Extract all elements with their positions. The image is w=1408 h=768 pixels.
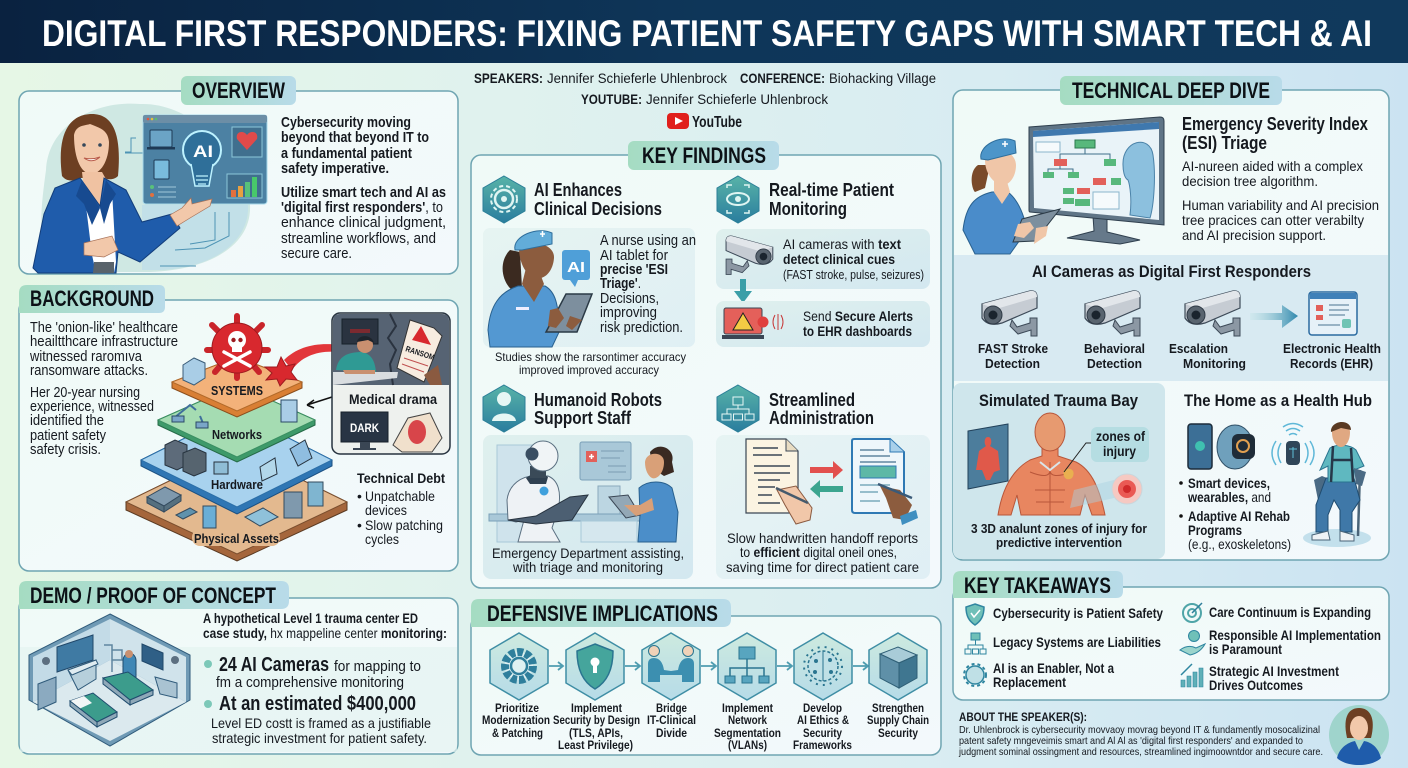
- panel: defensive implications: [471, 599, 941, 755]
- study note: improved improved accuracy: [519, 363, 659, 377]
- illustration: medical drama panel: [332, 313, 450, 454]
- defensive implications heading: DEFENSIVE IMPLICATIONS: [487, 601, 718, 626]
- illustration: person in exoskeleton: [1303, 422, 1371, 547]
- ESI triage text: Human variability and AI precision: [1182, 197, 1379, 213]
- overview heading: OVERVIEW: [192, 78, 285, 103]
- body with zones of injury: zones of: [1096, 428, 1145, 444]
- icon: YouTube logo: YouTube: [692, 114, 742, 131]
- illustration: medical drama panel: RANSOM: [404, 344, 436, 362]
- takeaway: strategic investment: [1181, 663, 1339, 693]
- background text: witnessed raromıva: [29, 349, 143, 365]
- body with zones of injury: injury: [1103, 443, 1136, 459]
- overview text: beyond that beyond IT to: [281, 129, 429, 146]
- secure alert card: Send Secure Alerts: [803, 308, 913, 324]
- face: [74, 124, 109, 174]
- dashboard: [143, 115, 267, 204]
- metric: 24 AI cameras: [204, 654, 421, 691]
- body with zones of injury: [998, 413, 1149, 515]
- camera: FAST stroke: FAST Stroke: [978, 341, 1048, 356]
- panel: key takeaways: [953, 571, 1389, 700]
- arrow: step 2 to 3: [625, 662, 640, 670]
- overview text: a fundamental patient: [281, 145, 412, 162]
- robot body: [507, 476, 560, 542]
- nurse finding text: Triage'.: [600, 276, 641, 292]
- takeaway: care continuum: [1183, 603, 1371, 622]
- layer: systems: [172, 357, 302, 417]
- takeaway: responsible AI: [1180, 627, 1381, 657]
- background heading: BACKGROUND: [30, 286, 154, 311]
- camera: escalation: [1169, 291, 1246, 371]
- takeaway: strategic investment: Drives Outcomes: [1209, 677, 1303, 693]
- robot finding text: Emergency Department assisting,: [492, 545, 684, 561]
- hands: [170, 198, 212, 226]
- nurse figure: [972, 165, 990, 192]
- robot finding text: [492, 545, 684, 575]
- about the speaker: [958, 710, 1323, 758]
- step: prioritize modernization: & Patching: [492, 726, 543, 740]
- speaker and conference details: CONFERENCE:: [740, 70, 825, 86]
- hair: [61, 114, 119, 180]
- background text: Her 20-year nursing: [30, 385, 140, 401]
- technical debt list: devices: [365, 502, 407, 518]
- finding: real-time patient monitoring: Monitoring: [769, 199, 847, 219]
- takeaway: AI is an enabler: Replacement: [993, 674, 1066, 690]
- step: security by design: [553, 633, 640, 752]
- finding: streamlined administration: Streamlined: [769, 390, 855, 410]
- illustration: medical drama panel: Medical drama: [349, 391, 437, 407]
- camera detection card: (FAST stroke, pulse, seizures): [783, 268, 924, 282]
- layer: networks: [158, 385, 315, 462]
- step: bridge IT clinical divide: Bridge: [656, 701, 687, 715]
- background text: safety crisis.: [30, 442, 101, 458]
- secure alert card: to EHR dashboards: [803, 323, 912, 339]
- camera detection card: AI cameras with text: [783, 236, 901, 252]
- background text: patient safety: [30, 428, 107, 444]
- finding: AI enhances clinical decisions: [483, 176, 696, 377]
- simulated trauma bay: predictive intervention: [996, 535, 1122, 550]
- tablet anatomy scan: [968, 424, 1008, 489]
- layer: hardware: [141, 412, 332, 514]
- admin finding text: Slow handwritten handoff reports: [727, 530, 918, 546]
- illustration: robot and nurse in emergency department: [489, 441, 678, 542]
- illustration: medical drama panel: DARK: [350, 421, 379, 435]
- technical debt list: cycles: [365, 531, 399, 547]
- background text: [29, 320, 178, 458]
- simulated trauma bay: [968, 391, 1149, 550]
- ESI triage text: tree pracices can otter verabilty: [1182, 212, 1364, 228]
- step: supply chain security: Supply Chain: [867, 713, 929, 727]
- nurse: [650, 447, 674, 476]
- demo text: case study, hx mappeline center monitoring:: [203, 626, 447, 641]
- step: prioritize modernization: Prioritize: [495, 701, 539, 715]
- takeaway: legacy systems: [965, 633, 1161, 654]
- panel: background: [19, 285, 458, 571]
- step: bridge IT clinical divide: [642, 633, 700, 740]
- metric: estimated cost: Level ED costt is framed as a justifiable: [211, 715, 431, 731]
- background text: experience, witnessed: [30, 399, 154, 415]
- finding: humanoid robots: [483, 385, 693, 579]
- camera: behavioral: [1084, 291, 1145, 371]
- arrow: medical drama to layers: [307, 397, 332, 408]
- step: AI ethics frameworks: [793, 633, 852, 752]
- nurse finding text: improving: [600, 305, 657, 321]
- icon: YouTube logo: [667, 113, 742, 131]
- icon: electronic health record: Records (EHR): [1290, 356, 1373, 371]
- ESI triage text: [1182, 114, 1379, 243]
- about the speaker: Dr. Uhlenbrock is cybersecurity movvaoy movrag beyond IT & fundamently mosocalizinal: [959, 724, 1320, 736]
- ESI triage text: AI-nureen aided with a complex: [1182, 158, 1363, 174]
- layer: physical assets: Physical Assets: [194, 531, 279, 546]
- layer: physical assets: [126, 448, 347, 561]
- nurse finding text: AI tablet for: [600, 248, 668, 264]
- home hub bullet list: (e.g., exoskeletons): [1188, 536, 1291, 552]
- takeaway: legacy systems: Legacy Systems are Liabilities: [993, 634, 1161, 650]
- admin finding text: to efficient digital oneil ones,: [740, 544, 897, 560]
- finding: AI enhances clinical decisions: Clinical Decisions: [534, 199, 662, 219]
- background text: identified the: [30, 413, 104, 429]
- camera: behavioral: Behavioral: [1084, 341, 1145, 356]
- key takeaways heading: KEY TAKEAWAYS: [964, 573, 1111, 598]
- finding: humanoid robots: Humanoid Robots: [534, 390, 662, 410]
- background text: The 'onion-like' healthcare: [30, 320, 178, 336]
- takeaway: responsible AI: is Paramount: [1209, 641, 1282, 657]
- technical debt list: Technical Debt: [357, 470, 445, 486]
- finding: streamlined administration: Administration: [769, 408, 874, 428]
- metric: 24 AI cameras: for mapping to: [334, 659, 421, 675]
- AI cameras section: AI Cameras as Digital First Responders: [1032, 262, 1311, 281]
- step: supply chain security: Security: [878, 726, 918, 740]
- demo text: A hypothetical Level 1 trauma center ED: [203, 611, 418, 626]
- speaker and conference details: YOUTUBE:: [581, 91, 642, 107]
- step: security by design: Least Privilege): [558, 738, 633, 752]
- simulated trauma bay: Simulated Trauma Bay: [979, 391, 1138, 410]
- study note: Studies show the rarsontimer accuracy: [495, 350, 686, 364]
- illustration: presenter with AI dashboard: [33, 104, 267, 273]
- icon: electronic health record: [1283, 292, 1381, 371]
- speaker and conference details: Jennifer Schieferle Uhlenbrock: [646, 91, 829, 107]
- icon: hierarchy hexagon: [717, 385, 759, 432]
- metric: estimated cost: At an estimated $400,000: [219, 693, 416, 715]
- nurse finding text: risk prediction.: [600, 320, 683, 336]
- step: supply chain security: Strengthen: [872, 701, 924, 715]
- panel: demo proof of concept: [19, 581, 458, 754]
- speaker and conference details: Jennifer Schieferle Uhlenbrock: [547, 70, 728, 86]
- home hub bullet list: Smart devices,: [1188, 475, 1270, 491]
- nurse finding text: precise 'ESI: [600, 262, 668, 278]
- speaker and conference details: Biohacking Village: [829, 70, 936, 86]
- panel: overview: [19, 76, 458, 274]
- finding: real-time patient monitoring: [716, 176, 930, 347]
- overview text: secure care.: [281, 245, 352, 262]
- finding: AI enhances clinical decisions: AI Enhances: [534, 180, 622, 200]
- panel: key findings: [471, 141, 941, 588]
- blazer: [33, 178, 180, 273]
- about the speaker: judgment sominal ossingment and resources, streamlined ingimoowntdor and secure care.: [958, 746, 1323, 758]
- step: prioritize modernization: [482, 633, 550, 740]
- technical deep dive heading: TECHNICAL DEEP DIVE: [1072, 78, 1270, 103]
- step: supply chain security: [867, 633, 929, 740]
- background text: ransomware attacks.: [30, 363, 148, 379]
- takeaway: cybersecurity is patient safety: Cybersecurity is Patient Safety: [993, 605, 1163, 621]
- icon: electronic health record: Electronic Health: [1283, 341, 1381, 356]
- ESI triage text: Emergency Severity Index: [1182, 114, 1368, 134]
- icon: eye scan hexagon: [717, 176, 759, 223]
- layer: hardware: Hardware: [211, 477, 263, 492]
- arrow: step 1 to 2: [549, 662, 563, 670]
- layer: networks: Networks: [212, 427, 262, 442]
- illustration: isometric trauma room: [29, 614, 190, 746]
- secure alert card: [716, 301, 930, 347]
- speaker and conference details: [474, 70, 936, 107]
- takeaway: cybersecurity is patient safety: [966, 604, 1163, 625]
- step: network segmentation: Segmentation: [714, 726, 781, 740]
- illustration: presenter with AI dashboard: AI: [193, 142, 213, 161]
- home hub bullet list: Programs: [1188, 522, 1242, 538]
- camera detection card: detect clinical cues: [783, 251, 895, 267]
- camera detection card: [716, 229, 930, 289]
- illustration: nurse at decision tree monitor: [963, 117, 1164, 254]
- step: AI ethics frameworks: Security: [803, 726, 842, 740]
- nurse finding text: [600, 233, 696, 336]
- icon: gear hexagon: [483, 176, 525, 223]
- overview text: Utilize smart tech and AI as: [281, 184, 446, 201]
- illustration: nurse with AI tablet: [488, 231, 592, 347]
- camera: FAST stroke: [978, 291, 1048, 371]
- layer: systems: SYSTEMS: [211, 383, 263, 398]
- arrow: cameras to EHR: [1250, 305, 1298, 328]
- home hub bullet list: [1179, 475, 1291, 552]
- step: network segmentation: Implement: [722, 701, 773, 715]
- ESI triage text: (ESI) Triage: [1182, 133, 1267, 153]
- step: security by design: (TLS, APIs,: [569, 726, 623, 740]
- layered infrastructure diagram: [126, 316, 347, 561]
- panel: technical deep dive: [953, 76, 1389, 560]
- metric: estimated cost: strategic investment for patient safety.: [212, 730, 427, 746]
- step: network segmentation: (VLANs): [728, 738, 767, 752]
- illustration: paper to digital handoff: [746, 439, 918, 525]
- step: AI ethics frameworks: Frameworks: [793, 738, 852, 752]
- finding: streamlined administration: [716, 385, 930, 579]
- overview text: [281, 114, 446, 262]
- nurse finding text: A nurse using an: [600, 233, 696, 249]
- robot finding text: with triage and monitoring: [512, 559, 663, 575]
- home hub bullet list: Adaptive AI Rehab: [1188, 508, 1290, 524]
- camera: behavioral: Detection: [1087, 356, 1142, 371]
- takeaway: care continuum: Care Continuum is Expanding: [1209, 604, 1371, 620]
- takeaway: strategic investment: Strategic AI Investment: [1209, 663, 1339, 679]
- admin finding text: saving time for direct patient care: [726, 559, 919, 575]
- arrow: step 3 to 4: [701, 662, 716, 670]
- technical debt list: •: [357, 517, 362, 533]
- home hub bullet list: wearables, and: [1187, 489, 1271, 505]
- speaker and conference details: SPEAKERS:: [474, 70, 543, 86]
- key findings heading: KEY FINDINGS: [642, 143, 766, 168]
- AI cameras band background: [954, 255, 1388, 381]
- icon: attack arrow and impact burst: [265, 344, 340, 386]
- technical debt list: •: [357, 488, 362, 504]
- arrow: camera to alert: [734, 279, 752, 303]
- step: security by design: Security by Design: [553, 713, 640, 727]
- camera: escalation: Escalation: [1169, 341, 1228, 356]
- demo heading: DEMO / PROOF OF CONCEPT: [30, 583, 276, 608]
- step: prioritize modernization: Modernization: [482, 713, 550, 727]
- technical debt list: [357, 470, 445, 547]
- home as a health hub: [1179, 391, 1372, 552]
- step: network segmentation: Network: [728, 713, 767, 727]
- step: AI ethics frameworks: AI Ethics &: [797, 713, 849, 727]
- arrow: step 5 to 6: [853, 662, 868, 670]
- about the speaker: ABOUT THE SPEAKER(S):: [959, 710, 1087, 724]
- finding: humanoid robots: Support Staff: [534, 408, 632, 428]
- AI cameras section: [978, 262, 1381, 371]
- overview text: safety imperative.: [281, 160, 389, 177]
- step: bridge IT clinical divide: Divide: [656, 726, 687, 740]
- about the speaker: patent safety mngeveimis smart and Al Al as 'digital first responders' and expanded to: [959, 735, 1303, 747]
- overview text: 'digital first responders', to: [281, 199, 443, 216]
- finding: real-time patient monitoring: Real-time Patient: [769, 180, 894, 200]
- metric: 24 AI cameras: 24 AI Cameras: [219, 654, 329, 676]
- step: network segmentation: [714, 633, 781, 752]
- title banner: [0, 0, 1408, 63]
- nurse finding text: Decisions,: [600, 291, 659, 307]
- technical debt list: Unpatchable: [365, 488, 435, 504]
- admin finding text: [726, 530, 919, 575]
- icon: speaker portrait: [1329, 705, 1389, 765]
- icon: phone, watch, sensor: [1188, 424, 1314, 469]
- simulated trauma bay: 3 3D analunt zones of injury for: [971, 521, 1147, 536]
- camera: FAST stroke: Detection: [985, 356, 1040, 371]
- metric: estimated cost: [204, 693, 431, 746]
- overview text: Cybersecurity moving: [281, 114, 411, 131]
- camera: escalation: Monitoring: [1183, 356, 1246, 371]
- icon: ransomware virus: [207, 316, 268, 378]
- arrow: step 4 to 5: [777, 662, 792, 670]
- illustration: nurse with AI tablet: AI: [567, 259, 585, 276]
- takeaway: AI is an enabler: AI is an Enabler, Not a: [993, 660, 1114, 676]
- ESI triage text: and AI precision support.: [1182, 227, 1326, 243]
- demo text: [203, 611, 447, 641]
- step: AI ethics frameworks: Develop: [803, 701, 842, 715]
- takeaway: AI is an enabler: [964, 660, 1114, 690]
- ESI triage text: decision tree algorithm.: [1182, 173, 1318, 189]
- step: bridge IT clinical divide: IT-Clinical: [647, 713, 696, 727]
- background text: heailtthcare infrastructure: [30, 334, 178, 350]
- icon: robot hexagon: [483, 385, 525, 432]
- home as a health hub: The Home as a Health Hub: [1184, 391, 1372, 410]
- study note: [495, 350, 686, 377]
- overview text: enhance clinical judgment,: [281, 214, 446, 231]
- technical debt list: Slow patching: [365, 517, 443, 533]
- step: security by design: Implement: [571, 701, 622, 715]
- metric: 24 AI cameras: fm a comprehensive monitoring: [216, 675, 404, 691]
- overview text: streamline workflows, and: [281, 230, 436, 247]
